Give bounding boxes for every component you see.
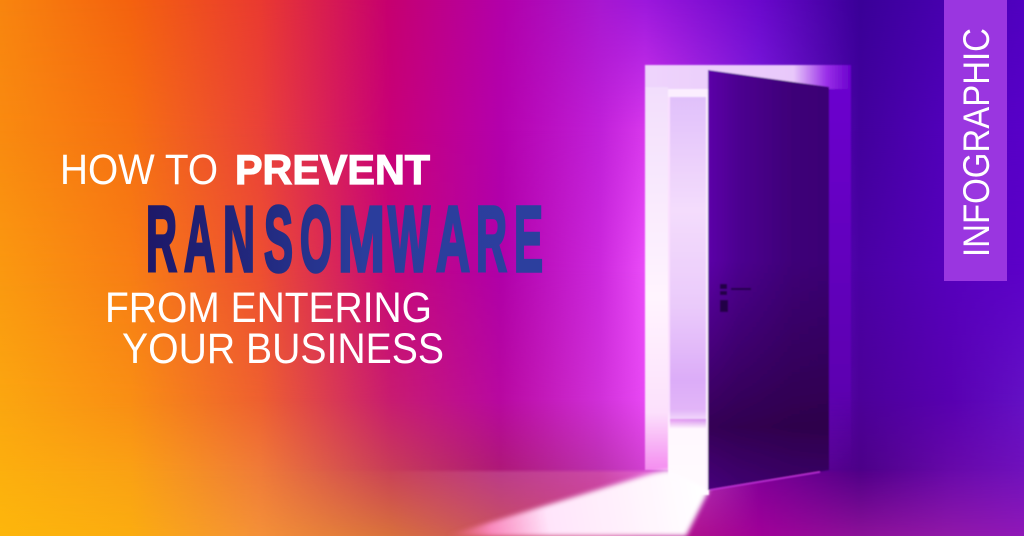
title keyword: ransomware: R [146,187,177,291]
title line 1: how to: HOW TO [60,146,218,194]
title keyword: ransomware: M [338,187,385,291]
tag label: INFOGRAPHIC [956,28,997,257]
title keyword: ransomware: O [300,187,332,291]
title keyword: ransomware: A [184,187,215,291]
door frame: lintel [645,65,851,89]
infographic banner artwork: E [514,187,543,291]
light through opening [670,97,709,419]
title keyword: ransomware [146,187,543,291]
title [60,146,543,373]
door leaf [708,70,829,490]
floor light in opening [668,410,709,495]
open doorway [445,65,851,536]
door lit edge [706,95,709,490]
title line 3: FROM ENTERING [105,284,432,332]
title line 4: YOUR BUSINESS [122,325,444,373]
door handle [720,284,751,312]
title line 1: prevent: PREVENT [235,146,430,193]
door frame: left jamb [645,87,668,470]
door bottom edge highlight [710,472,820,490]
title keyword: ransomware: N [223,187,255,291]
title keyword: ransomware: S [264,187,293,291]
light spill on floor [445,470,709,536]
title keyword: ransomware: R [476,187,507,291]
infographic tag [944,0,1007,281]
title keyword: ransomware: A [436,187,470,291]
title keyword: ransomware: W [388,187,430,291]
door frame: right jamb [828,65,851,470]
